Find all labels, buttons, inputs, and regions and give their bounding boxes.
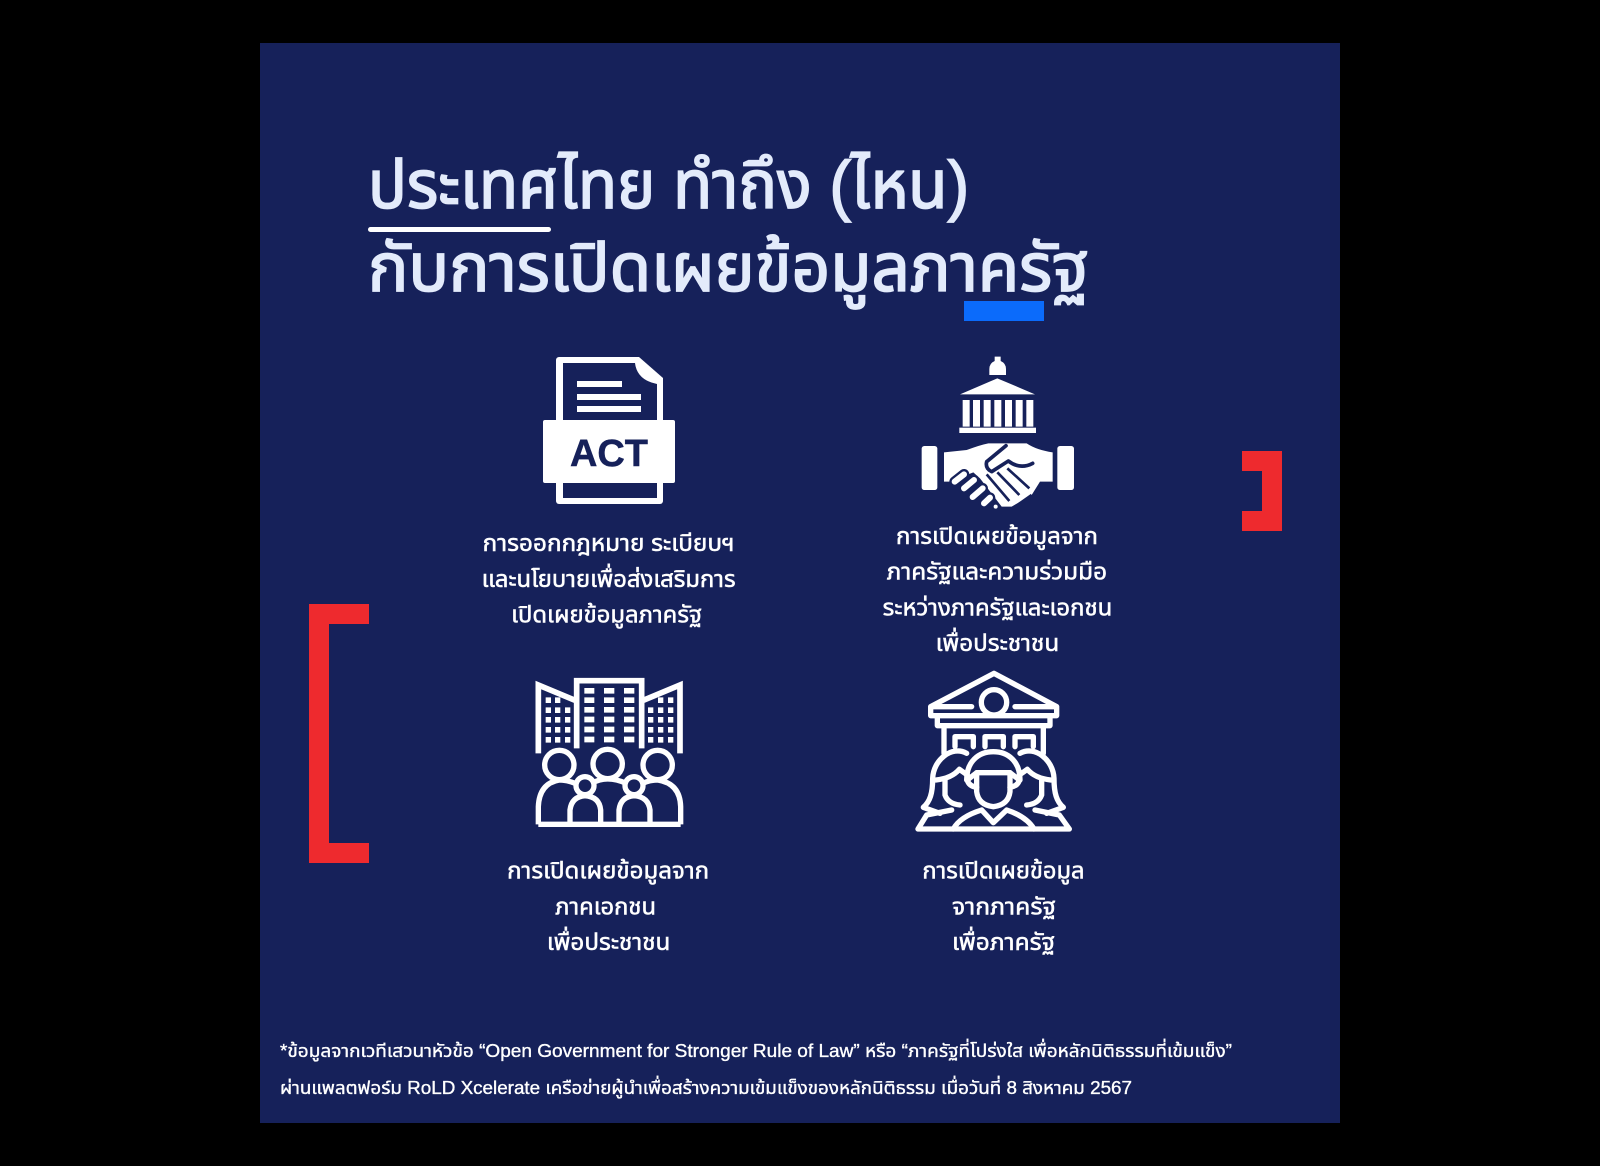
label: government and partnership: ระหว่างภาครัฐและเอกชน (883, 594, 1112, 620)
decoration: right red bracket (1242, 451, 1282, 531)
label: government and partnership (883, 523, 1112, 656)
footnote (280, 1038, 1232, 1100)
panel: navy background (260, 43, 1340, 1123)
title: กับการเปิดเผยข้อมูลภาครัฐ (368, 231, 1089, 309)
label: private sector (507, 858, 709, 955)
footnote: *ข้อมูลจากเวทีเสวนาหัวข้อ “Open Government for Stronger Rule of Law” หรือ “ภาครัฐที่โปร่งใส เพื่อหลักนิติธรรมที่เข้มแข็ง” (280, 1038, 1232, 1063)
label: government and partnership: การเปิดเผยข้อมูลจาก (896, 523, 1098, 551)
label: public sector: จากภาครัฐ (952, 893, 1056, 919)
footnote: ผ่านแพลตฟอร์ม RoLD Xcelerate เครือข่ายผู้นำเพื่อสร้างความเข้มแข็งของหลักนิติธรรม เมื่อวันที่ 8 สิงหาคม 2567 (280, 1075, 1132, 1100)
label: public sector: การเปิดเผยข้อมูล (922, 858, 1085, 886)
label: laws and policy: เปิดเผยข้อมูลภาครัฐ (511, 602, 702, 630)
label: government and partnership: ภาครัฐและความร่วมมือ (887, 559, 1107, 585)
icon: ACT document: ACT (570, 433, 648, 475)
label: public sector (922, 858, 1085, 955)
label: laws and policy: และนโยบายเพื่อส่งเสริมการ (482, 563, 736, 592)
label: public sector: เพื่อภาครัฐ (952, 926, 1055, 955)
label: private sector: ภาคเอกชน (555, 893, 656, 919)
title accent: blue bar (964, 301, 1044, 321)
decoration: left red bracket (309, 604, 369, 863)
title accent: white underline (368, 227, 551, 232)
icon: public sector institution and officials (918, 673, 1069, 829)
label: government and partnership: เพื่อประชาชน (936, 627, 1059, 656)
title: ประเทศไทย ทำถึง (ไหน) (368, 148, 969, 223)
title (368, 148, 1089, 309)
label: laws and policy (482, 530, 736, 630)
icon: ACT document (543, 357, 675, 504)
label: laws and policy: การออกกฎหมาย ระเบียบฯ (483, 530, 735, 556)
icon: government handshake (922, 357, 1074, 509)
label: private sector: การเปิดเผยข้อมูลจาก (507, 858, 709, 886)
icon: private sector buildings and people (538, 681, 681, 824)
label: private sector: เพื่อประชาชน (547, 926, 670, 955)
